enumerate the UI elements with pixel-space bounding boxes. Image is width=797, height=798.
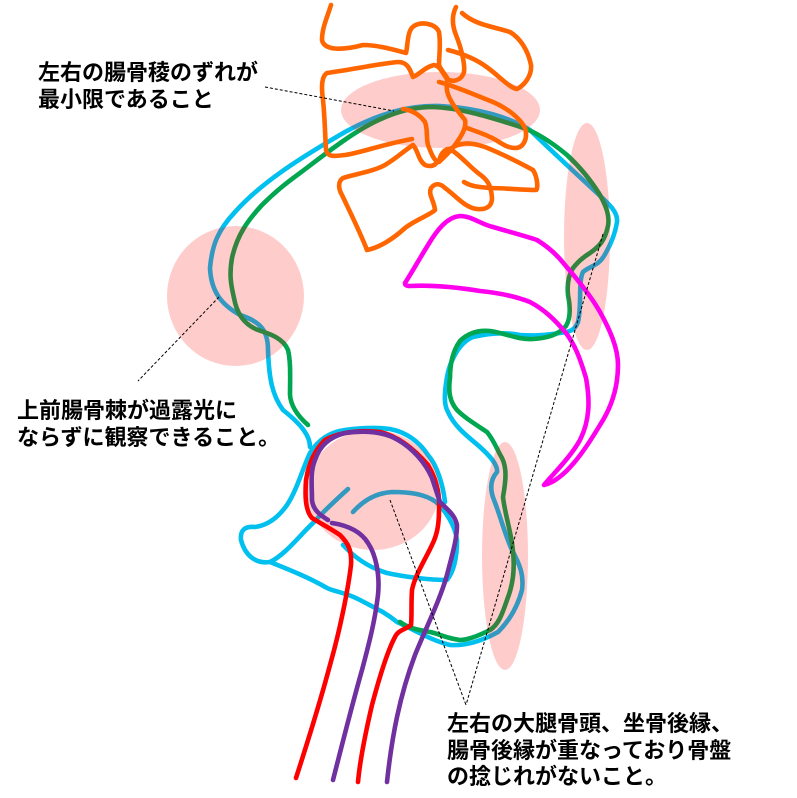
callout: femoral heads and pelvis rotation: の捻じれがないこと。 — [447, 764, 667, 789]
orange sacrum and spine outline — [322, 5, 537, 250]
highlight: posterior ischium — [482, 442, 528, 670]
callout: iliac crest alignment: 左右の腸骨稜のずれが — [38, 60, 258, 85]
highlight: anterior superior iliac spine — [167, 226, 304, 366]
red femur outline — [296, 431, 439, 782]
callout: anterior superior iliac spine: 上前腸骨棘が過露光に — [17, 398, 237, 423]
highlight: femoral head — [307, 430, 439, 550]
cyan pelvis outline — [210, 106, 617, 645]
highlight: iliac crest — [341, 72, 540, 148]
leader line: femoral head — [390, 500, 466, 705]
callout: femoral heads and pelvis rotation: 腸骨後縁が重なっており骨盤 — [447, 738, 731, 763]
leader line: posterior ilium — [466, 234, 603, 705]
callout: femoral heads and pelvis rotation: 左右の大腿骨頭、坐骨後縁、 — [447, 711, 733, 736]
leader line: anterior superior iliac spine — [138, 297, 219, 381]
green pelvis outline — [231, 107, 609, 640]
purple femur outline — [312, 432, 457, 782]
callout: iliac crest alignment: 最小限であること — [38, 87, 214, 112]
leader line: iliac crest — [265, 87, 394, 111]
callout: anterior superior iliac spine: ならずに観察できること。 — [17, 425, 280, 450]
highlight: posterior ilium — [564, 123, 610, 350]
magenta obturator outline — [405, 216, 618, 485]
